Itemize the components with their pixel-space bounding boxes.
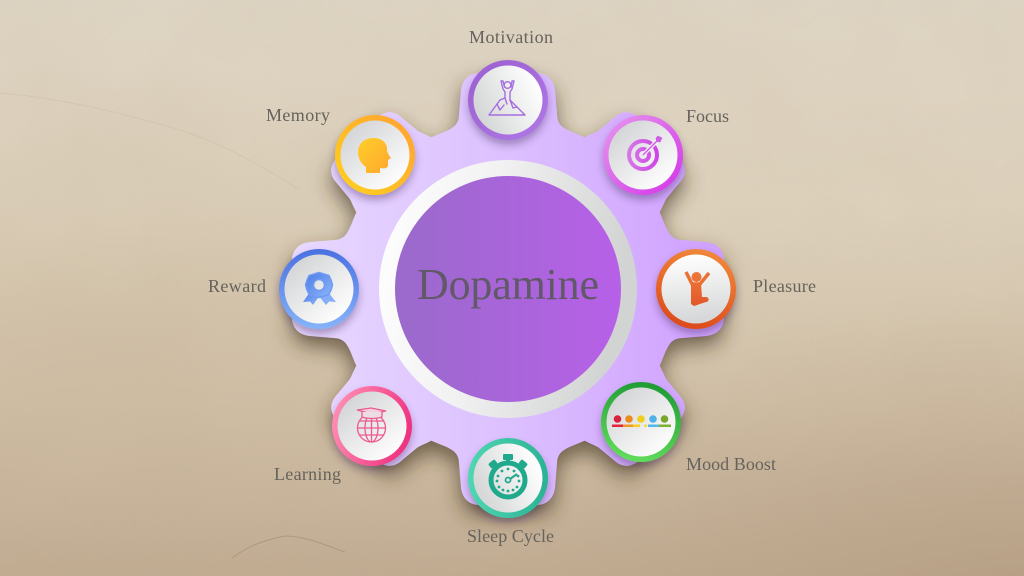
badge: Sleep Cycle bbox=[468, 438, 548, 518]
central circle: Dopamine bbox=[379, 160, 637, 418]
badge: Motivation bbox=[468, 60, 548, 140]
badge: Pleasure bbox=[656, 249, 736, 329]
icon: mood scale bbox=[612, 415, 671, 427]
icon: joyful person bbox=[686, 272, 709, 306]
label: Pleasure: Pleasure bbox=[753, 276, 816, 296]
label: Focus: Focus bbox=[686, 106, 729, 126]
label: Memory: Memory bbox=[266, 105, 330, 125]
icon: globe with graduation cap bbox=[357, 408, 386, 442]
label: Reward: Reward bbox=[208, 276, 266, 296]
label: Learning: Learning bbox=[274, 464, 341, 484]
icon: target with arrow bbox=[629, 136, 662, 169]
icon: human head profile bbox=[358, 138, 391, 173]
icon: stopwatch bbox=[488, 454, 528, 497]
icon: mountain climber bbox=[489, 81, 525, 115]
icon: award rosette bbox=[303, 272, 336, 305]
label: Mood Boost: Mood Boost bbox=[686, 454, 776, 474]
gear shape bbox=[280, 60, 736, 520]
badge: Reward bbox=[279, 249, 359, 329]
label: Sleep Cycle: Sleep Cycle bbox=[467, 526, 554, 546]
label: Motivation: Motivation bbox=[469, 27, 553, 47]
badge: Mood Boost bbox=[601, 382, 681, 462]
title: Dopamine bbox=[417, 260, 599, 309]
badge: Memory bbox=[335, 115, 415, 195]
badge: Focus bbox=[603, 115, 683, 195]
badge: Learning bbox=[332, 386, 412, 466]
